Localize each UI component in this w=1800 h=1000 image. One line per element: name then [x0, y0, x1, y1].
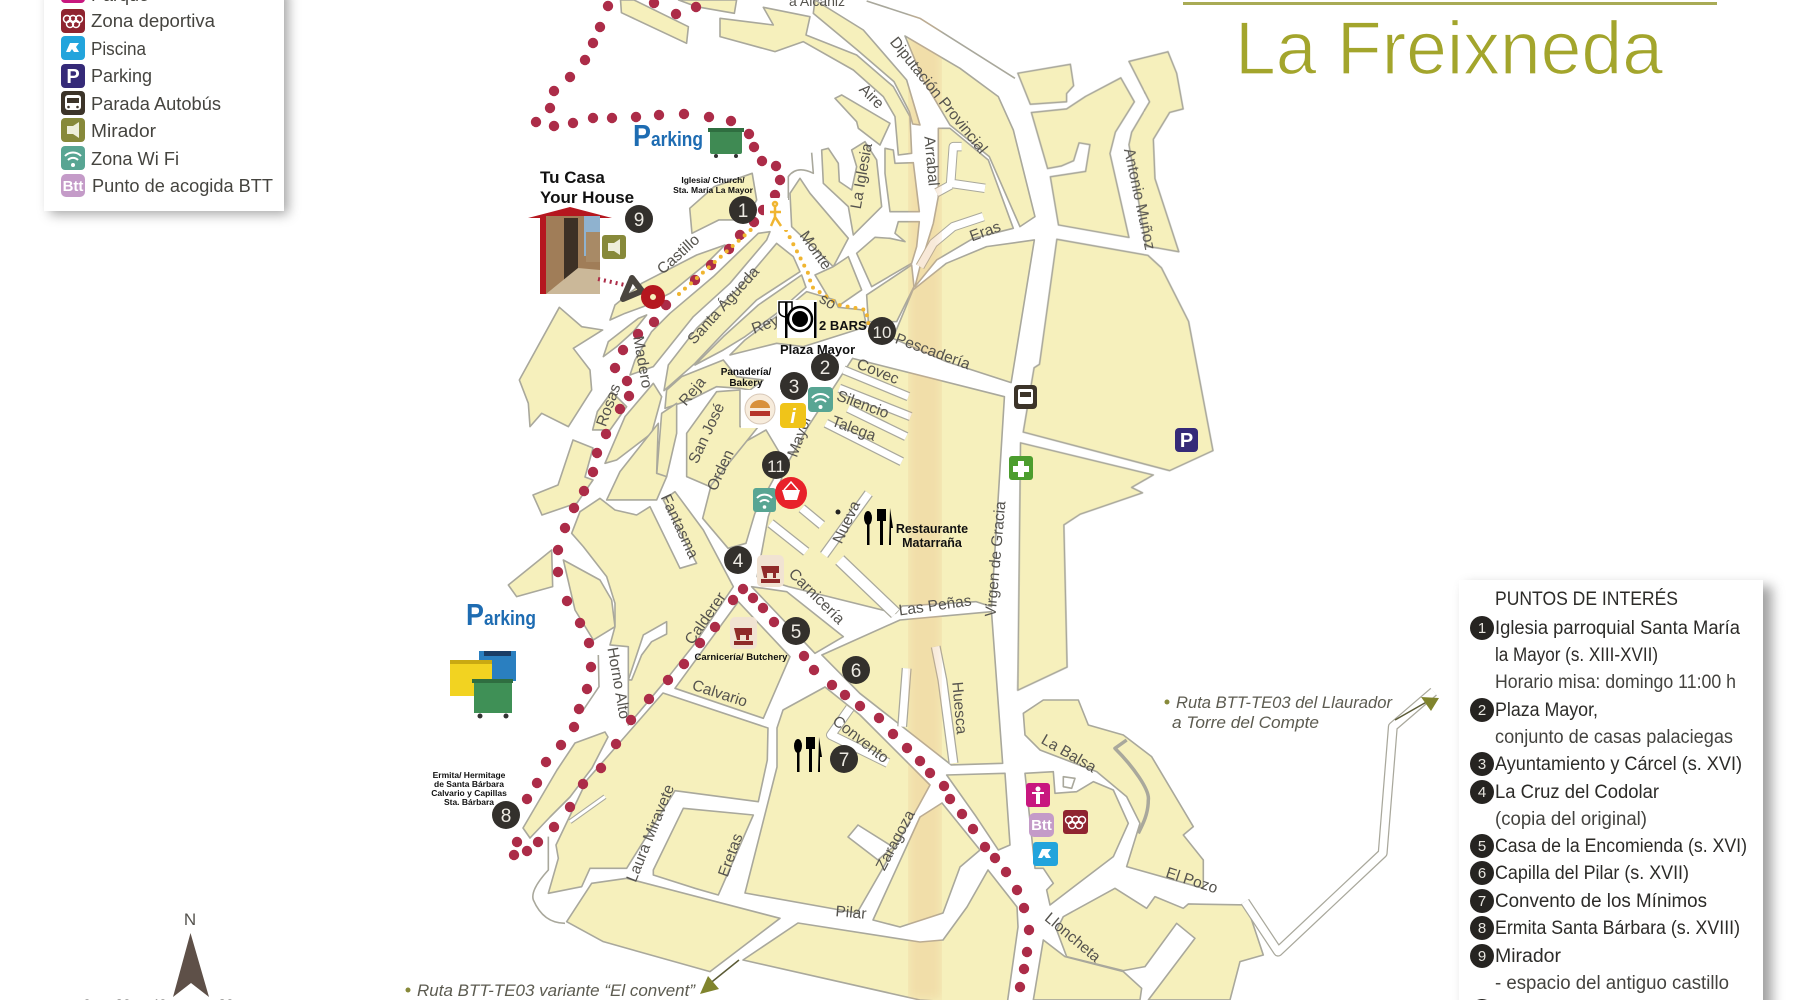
numbered map markers: 8	[501, 806, 511, 827]
street names: Diputación Provincial	[886, 34, 990, 157]
legend panel: Piscina	[91, 39, 147, 59]
legend panel: Zona Wi Fi	[91, 149, 179, 169]
legend panel: Zona deportiva	[91, 11, 216, 31]
numbered map markers: 6	[851, 661, 861, 682]
street names: Monte	[796, 228, 835, 273]
icon: tourist info: i	[790, 406, 796, 428]
street names: Rosas	[593, 382, 624, 429]
street names: Reja	[676, 374, 710, 409]
bars icon and labels: 2 BARS	[819, 318, 867, 333]
street names: Convento	[829, 713, 892, 767]
church label	[673, 175, 754, 195]
points of interest panel: Mirador	[1495, 946, 1562, 967]
icon: start triangle and red target	[598, 278, 660, 304]
points of interest panel: 9	[1478, 948, 1486, 965]
street names: Rey	[749, 312, 781, 338]
icon: butchery south and label: Carnicería/ Butchery	[695, 652, 788, 663]
restaurant Matarraña	[836, 508, 968, 550]
icon: recycling bins	[450, 651, 516, 718]
street names: Calvario	[690, 677, 749, 711]
street names: San José	[685, 401, 728, 466]
hermitage label: Ermita/ Hermitage	[433, 770, 506, 780]
icon: green bin	[708, 128, 744, 158]
street names: El Pozo	[1164, 865, 1220, 897]
numbered map markers: 1	[738, 201, 748, 222]
legend panel: Parada Autobús	[91, 94, 221, 114]
legend panel: Mirador	[91, 121, 156, 141]
points of interest panel: 2	[1478, 702, 1486, 719]
icon: butchery north	[757, 555, 784, 587]
numbered map markers: 3	[789, 377, 799, 398]
map: town blocks and streets	[508, 0, 1434, 1000]
bars icon and labels: Plaza Mayor	[780, 342, 855, 357]
street names: Castillo	[654, 231, 703, 278]
legend panel: Parking	[91, 66, 152, 86]
points of interest panel: 5	[1478, 838, 1486, 855]
icon: bakery and label	[721, 367, 781, 428]
numbered map markers: 4	[733, 551, 744, 572]
street names: Orden	[704, 447, 738, 494]
street names: Eretas	[715, 831, 747, 879]
street names: Pescadería	[893, 330, 973, 373]
bars icon and labels	[777, 300, 867, 357]
arrow: east route	[1395, 697, 1439, 720]
icon: bus stop	[1014, 385, 1037, 409]
hermitage label: Calvario y Capillas	[431, 788, 507, 798]
parking labels: Parking	[633, 118, 703, 153]
street names: so	[816, 290, 839, 313]
points of interest panel: 6	[1478, 865, 1486, 882]
icon: walker	[764, 198, 788, 230]
icon: pharmacy cross	[1009, 456, 1033, 480]
numbered map markers: 10	[873, 323, 891, 342]
points of interest panel: conjunto de casas palaciegas	[1495, 727, 1733, 748]
street names: Mayor	[785, 413, 815, 459]
house label	[540, 168, 634, 207]
points of interest panel: 4	[1478, 784, 1486, 801]
icon: convent cutlery	[794, 737, 822, 772]
icon: bakery and label: Bakery	[729, 378, 763, 389]
parking labels: Parking	[466, 597, 536, 632]
points of interest panel: 3	[1478, 756, 1486, 773]
street names: Carnicería	[785, 565, 848, 628]
street names: La Iglesia	[848, 142, 876, 210]
street names: Eras	[967, 218, 1003, 245]
street names: La Balsa	[1038, 731, 1099, 776]
street names: Santa Águeda	[684, 263, 763, 348]
numbered map markers: 7	[839, 750, 849, 771]
icons: park, btt, sports, pool: Btt	[1031, 817, 1052, 834]
icon: wifi and market basket	[753, 477, 807, 512]
north arrow and scale	[83, 910, 234, 1000]
route label east	[1164, 694, 1394, 732]
yellow dotted route	[679, 200, 871, 338]
house label: Tu Casa	[540, 168, 605, 187]
street names: Covec	[854, 356, 901, 388]
icon: bakery and label: Panadería/	[721, 367, 772, 378]
street names: Antonio Muñoz	[1120, 147, 1158, 252]
legend panel: P	[66, 66, 80, 88]
hermitage label	[431, 770, 507, 807]
route label south: Ruta BTT-TE03 variante “El convent”	[417, 982, 697, 1000]
legend panel	[44, 0, 288, 214]
hermitage label: de Santa Bárbara	[434, 779, 504, 789]
title: La Freixneda	[1235, 6, 1663, 90]
points of interest panel: Capilla del Pilar (s. XVII)	[1495, 863, 1689, 884]
icon: parking	[1175, 428, 1198, 452]
route label east: a Torre del Compte	[1172, 714, 1319, 732]
points of interest panel	[1459, 580, 1772, 1000]
points of interest panel: Casa de la Encomienda (s. XVI)	[1495, 836, 1747, 857]
house label: Your House	[540, 188, 634, 207]
points of interest panel: Iglesia parroquial Santa María	[1495, 618, 1740, 639]
parking labels	[466, 118, 703, 632]
street names: Arrabal	[920, 135, 942, 187]
street names: Calderer	[682, 589, 730, 648]
points of interest panel: Horario misa: domingo 11:00 h	[1495, 672, 1736, 693]
icon: tourist info	[780, 403, 806, 428]
numbered map markers: 11	[767, 457, 785, 476]
street names: Silencio	[834, 388, 891, 422]
street names: Fantasma	[657, 492, 702, 562]
points of interest panel: PUNTOS DE INTERÉS	[1495, 589, 1678, 610]
street names: Huesca	[948, 681, 970, 735]
points of interest panel: Ermita Santa Bárbara (s. XVIII)	[1495, 918, 1740, 939]
points of interest panel: 8	[1478, 920, 1486, 937]
street names: Laura Miravete	[624, 782, 678, 884]
points of interest panel: 7	[1478, 893, 1486, 910]
legend panel: Punto de acogida BTT	[92, 176, 273, 196]
icons: park, btt, sports, pool	[1026, 783, 1088, 866]
street names: Pilar	[835, 903, 867, 923]
street names: Horno Alto	[603, 646, 633, 720]
points of interest panel: - espacio del antiguo castillo	[1495, 973, 1729, 994]
route label east: Ruta BTT-TE03 del Llaurador	[1176, 694, 1394, 712]
legend panel: Btt	[63, 178, 83, 195]
points of interest panel: Convento de los Mínimos	[1495, 891, 1707, 912]
street names: Madero	[629, 335, 655, 390]
street names: Talega	[829, 413, 878, 445]
street names: Lloncheta	[1041, 910, 1104, 966]
hermitage label: Sta. Bárbara	[444, 797, 494, 807]
points of interest panel: Plaza Mayor,	[1495, 700, 1598, 721]
street names: Nueva	[830, 498, 864, 546]
numbered map markers	[492, 196, 896, 829]
icon: wifi	[808, 387, 833, 412]
street names: Virgen de Gracia	[982, 500, 1009, 618]
points of interest panel: La Cruz del Codolar	[1495, 782, 1660, 803]
points of interest panel: Ayuntamiento y Cárcel (s. XVI)	[1495, 754, 1742, 775]
icon: viewpoint	[602, 235, 626, 259]
street names	[593, 0, 1220, 966]
street names: Aire	[856, 81, 887, 112]
points of interest panel: (copia del original)	[1495, 809, 1647, 830]
red dotted walking route	[509, 0, 1034, 992]
church label: Sta. María La Mayor	[673, 185, 754, 195]
north arrow and scale: N	[184, 910, 196, 929]
icon: butchery south and label	[695, 617, 788, 663]
restaurant Matarraña: Restaurante	[896, 522, 968, 536]
church label: Iglesia/ Church/	[681, 175, 745, 185]
restaurant Matarraña: Matarraña	[902, 536, 963, 550]
arrow: south route	[700, 960, 739, 994]
street names: Las Peñas	[898, 592, 973, 619]
numbered map markers: 5	[791, 622, 801, 643]
icon: parking: P	[1180, 430, 1193, 452]
street names: Zaragoza	[873, 807, 919, 873]
numbered map markers: 9	[634, 210, 644, 231]
points of interest panel: la Mayor (s. XIII-XVII)	[1495, 645, 1658, 666]
points of interest panel: 1	[1478, 620, 1486, 637]
numbered map markers: 2	[820, 358, 830, 379]
icon: house photo	[528, 207, 612, 294]
